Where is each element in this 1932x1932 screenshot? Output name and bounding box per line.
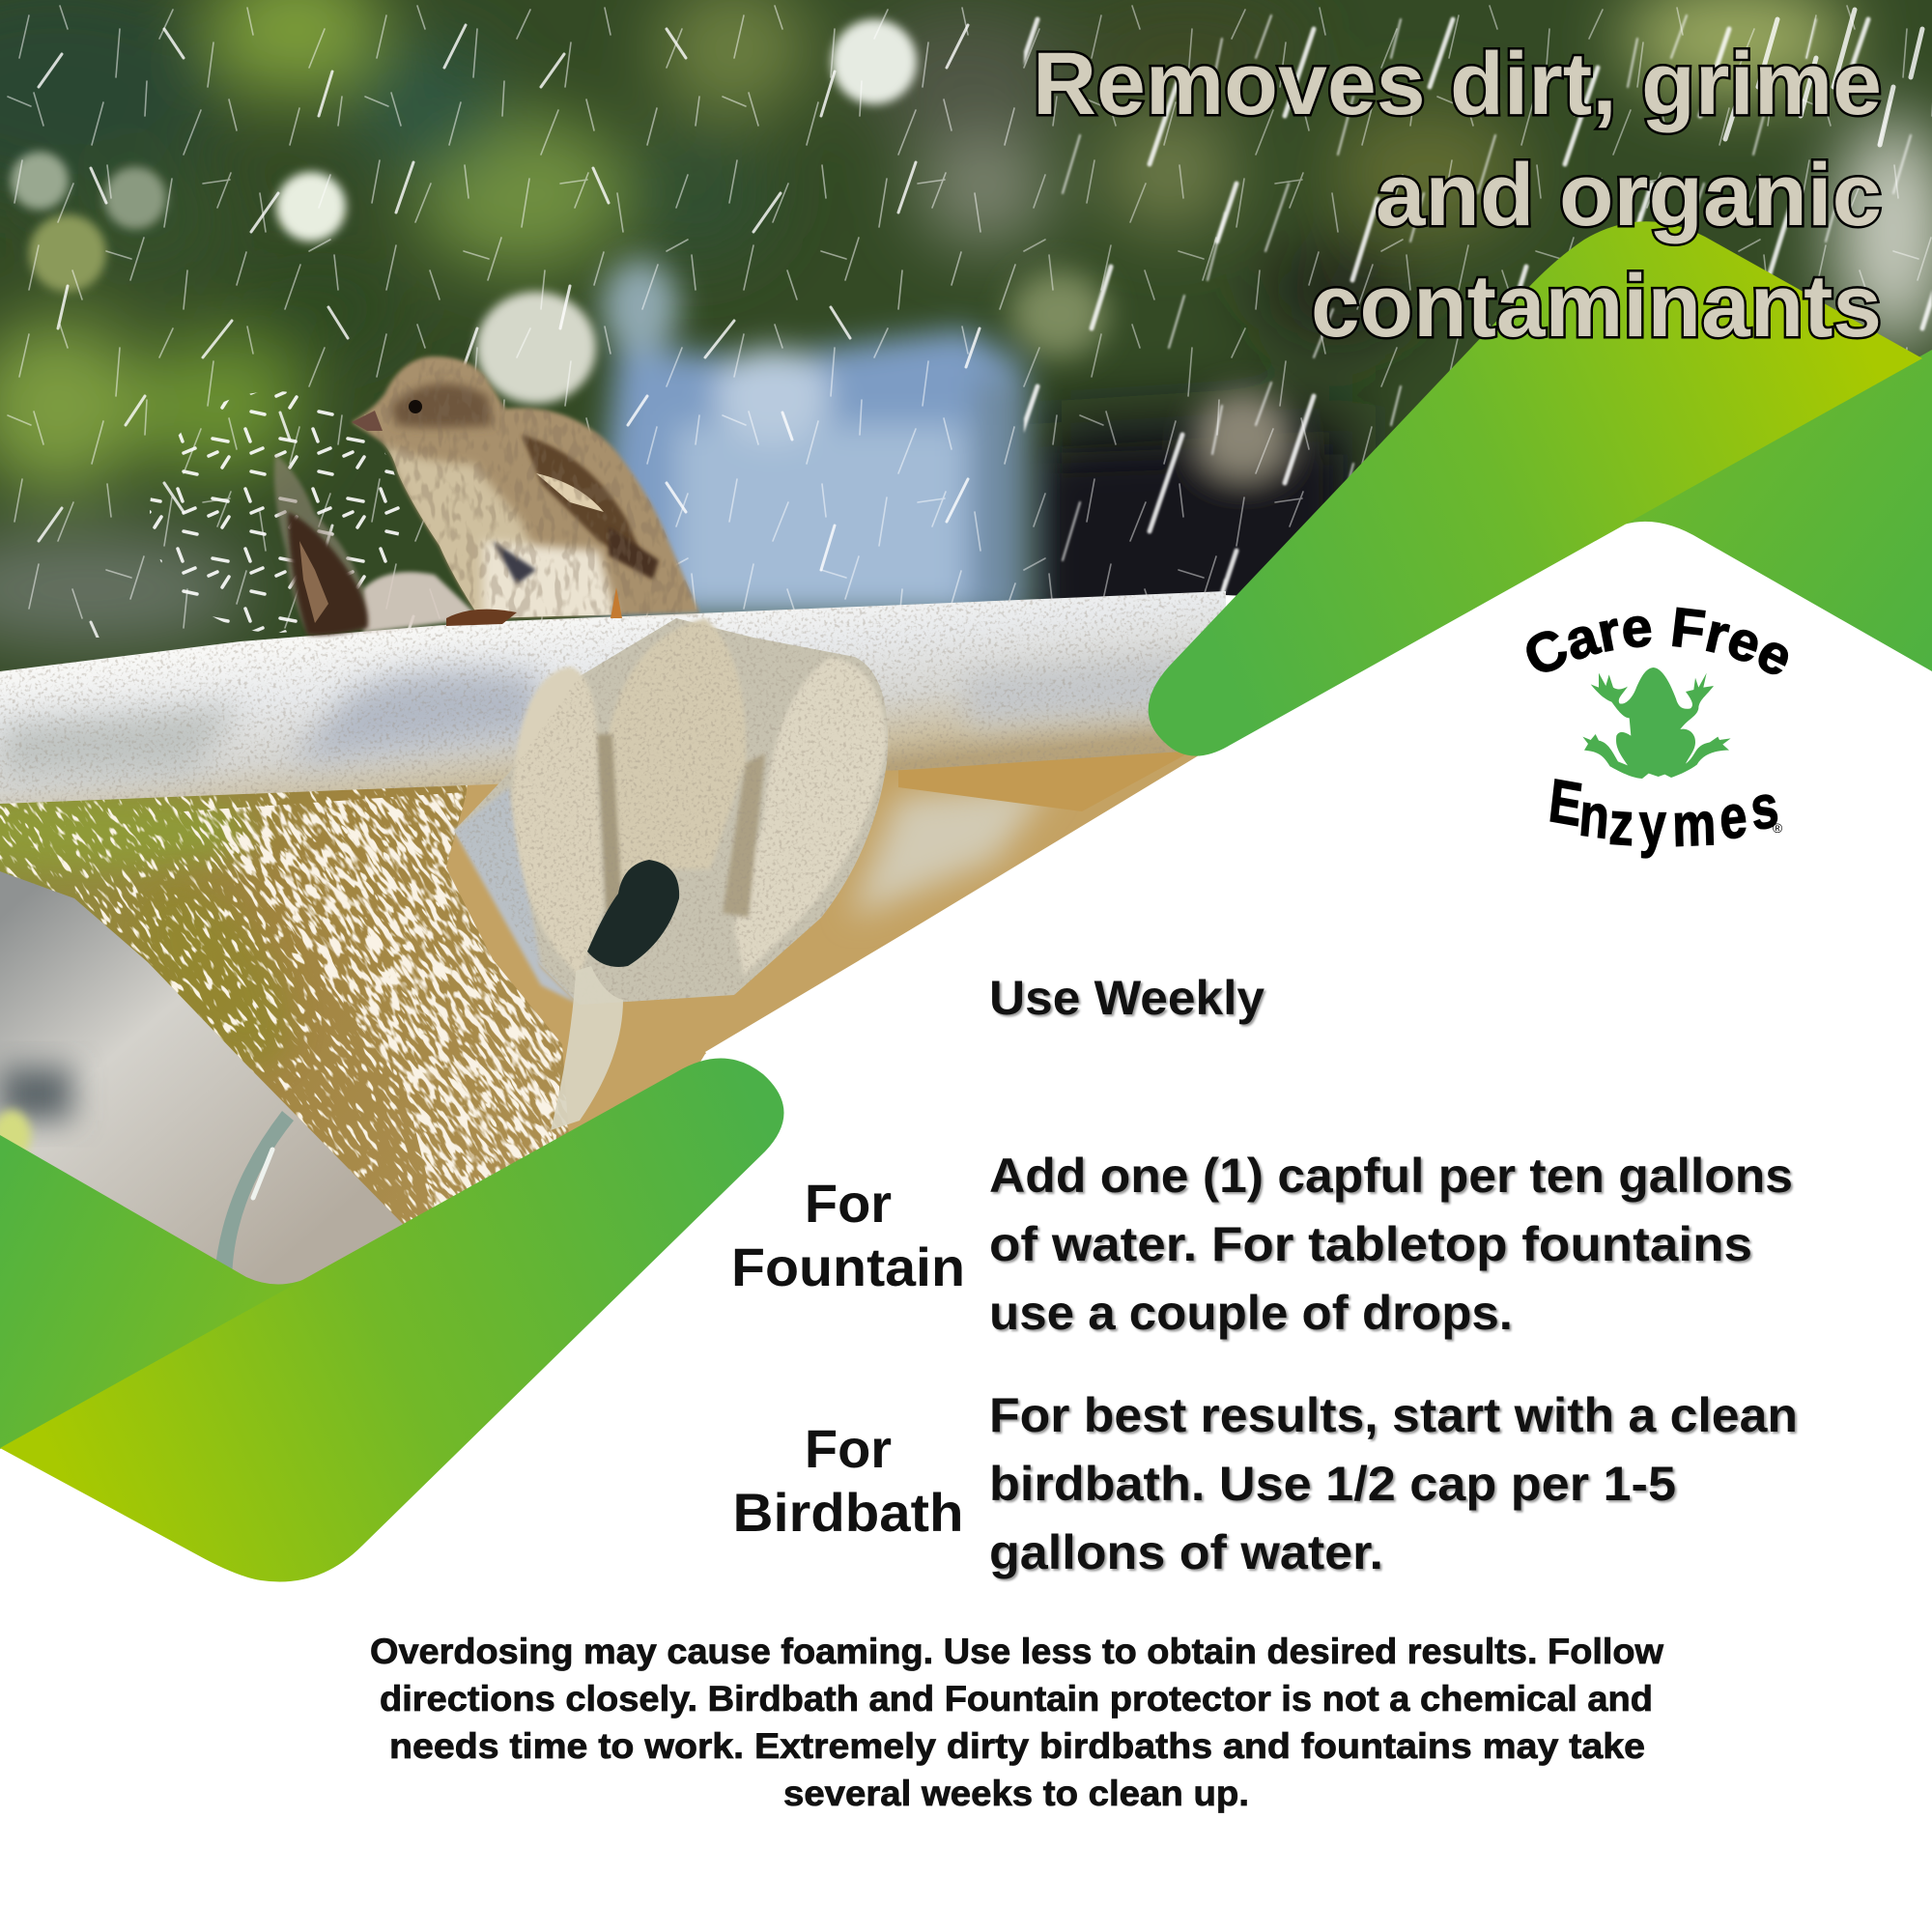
photo: fountain bowl underside <box>0 784 568 1224</box>
label: for fountain <box>731 1173 965 1297</box>
text: fountain directions: use a couple of drops. <box>989 1286 1513 1340</box>
title: contaminants <box>1311 257 1882 355</box>
logo: Care Free wordmark: Care Free <box>1526 607 1789 674</box>
title <box>1033 35 1882 355</box>
text: overdosing caution note: several weeks to clean up. <box>783 1774 1249 1813</box>
text: fountain directions: of water. For tabletop fountains <box>989 1217 1752 1271</box>
title: and organic <box>1376 146 1882 244</box>
text: birdbath directions: gallons of water. <box>989 1525 1383 1579</box>
text: birdbath directions <box>989 1388 1798 1579</box>
text: overdosing caution note: Overdosing may cause foaming. Use less to obtain desired results. Follow <box>370 1632 1663 1671</box>
text: overdosing caution note <box>370 1632 1663 1813</box>
text: fountain directions: Add one (1) capful per ten gallons <box>989 1149 1793 1203</box>
photo background: blurred foliage and sky <box>0 0 1932 671</box>
text: use weekly: Use Weekly <box>989 971 1264 1025</box>
label: for birdbath <box>732 1418 964 1543</box>
photo: bird on fountain rim with water spray <box>0 0 1932 1509</box>
water spray streaks <box>0 0 1024 638</box>
green banner: top right rear band <box>1430 350 1932 681</box>
photo: pale background under the bowl arch <box>0 865 411 1449</box>
photo: dark spout hole <box>587 860 679 967</box>
text: birdbath directions: birdbath. Use 1/2 cap per 1-5 <box>989 1457 1676 1511</box>
text: birdbath directions: For best results, start with a clean <box>989 1388 1798 1442</box>
white content panel <box>0 522 1932 1932</box>
text: overdosing caution note: needs time to work. Extremely dirty birdbaths and fountains may take <box>389 1726 1645 1766</box>
text: overdosing caution note: directions closely. Birdbath and Fountain protector is not a chemical and <box>380 1679 1653 1719</box>
photo: sparrow <box>348 353 705 626</box>
label: for birdbath: Birdbath <box>732 1482 964 1543</box>
photo: fountain rim <box>0 589 1227 811</box>
logo: registered mark: ® <box>1773 820 1783 836</box>
text: fountain directions <box>989 1149 1793 1340</box>
icon: green frog <box>1582 668 1731 779</box>
label: for fountain: Fountain <box>731 1236 965 1297</box>
logo: Care Free Enzymes <box>1526 607 1789 860</box>
logo: Enzymes wordmark: Enzymes <box>1546 767 1781 860</box>
photo: water trickle <box>551 966 623 1130</box>
photo: scalloped shell ornament <box>454 618 889 1130</box>
title: Removes dirt, grime <box>1033 35 1882 133</box>
photo: sparrow's splashing companion <box>274 454 480 636</box>
green banner: bottom left rear band <box>0 1135 319 1449</box>
photo: stone body below rim <box>425 739 1226 1169</box>
label: for birdbath: For <box>805 1418 892 1479</box>
green banner: bottom left front band <box>0 1058 784 1582</box>
label: for fountain: For <box>805 1173 892 1234</box>
green banner: top right front band <box>1149 221 1922 756</box>
